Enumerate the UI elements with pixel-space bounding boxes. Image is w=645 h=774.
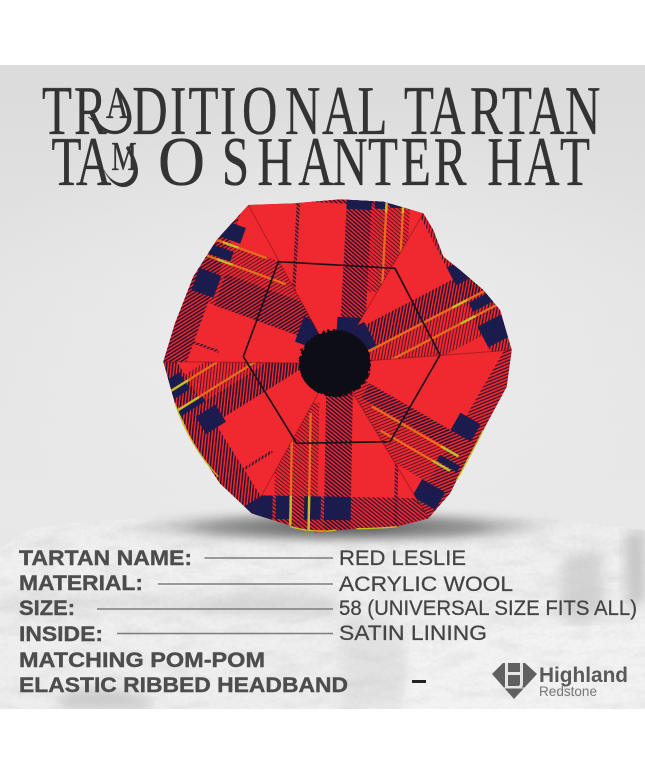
pom-pom bbox=[299, 330, 371, 397]
title line 1: DITIONAL bbox=[132, 73, 387, 150]
spec labels: ELASTIC RIBBED HEADBAND bbox=[19, 674, 348, 697]
logo: Highland Redstone bbox=[492, 663, 628, 699]
spec values: RED LESLIE bbox=[339, 547, 466, 570]
spec labels: MATERIAL: bbox=[19, 572, 143, 595]
title line 1 bbox=[42, 73, 600, 150]
panel: top bbox=[249, 199, 424, 334]
title line 2: M bbox=[111, 133, 137, 179]
stone plinth bbox=[0, 510, 645, 710]
title line 2: HAT bbox=[487, 124, 590, 201]
spec labels: INSIDE: bbox=[19, 623, 103, 646]
panel: bottom bbox=[252, 390, 428, 532]
hat shadow bbox=[120, 509, 570, 545]
panel: upper right bbox=[352, 214, 512, 360]
stone shading bbox=[0, 530, 645, 709]
spec values bbox=[339, 547, 637, 645]
spec values: SATIN LINING bbox=[339, 622, 487, 645]
panel: upper left bbox=[163, 205, 319, 363]
panel: lower left bbox=[163, 362, 313, 514]
spec labels: TARTAN NAME: bbox=[19, 547, 192, 570]
spec labels bbox=[19, 547, 348, 697]
panel: lower right bbox=[352, 350, 512, 518]
specification list bbox=[19, 547, 637, 697]
title line 2: TA bbox=[52, 124, 111, 201]
title line 2: SHANTER bbox=[222, 124, 467, 201]
panel seams bbox=[163, 205, 512, 518]
headband trim bbox=[175, 403, 483, 531]
logo subtitle: Redstone bbox=[539, 683, 597, 699]
leader lines bbox=[97, 558, 333, 634]
logo wordmark: Highland bbox=[539, 664, 628, 687]
hat base bbox=[163, 199, 512, 533]
title line 1: TR bbox=[42, 73, 107, 150]
spec labels: MATCHING POM-POM bbox=[19, 649, 265, 672]
spec values: ACRYLIC WOOL bbox=[339, 573, 513, 596]
title line 2 bbox=[52, 124, 590, 201]
title line 1: TARTAN bbox=[404, 73, 600, 150]
spec values: 58 (UNIVERSAL SIZE FITS ALL) bbox=[339, 597, 637, 620]
tartan hat bbox=[163, 199, 512, 533]
title line 1: A bbox=[106, 79, 129, 128]
title bbox=[42, 73, 600, 201]
icon: diamond emblem bbox=[492, 663, 537, 699]
spec labels: SIZE: bbox=[19, 597, 75, 620]
title line 2: O bbox=[158, 124, 205, 201]
